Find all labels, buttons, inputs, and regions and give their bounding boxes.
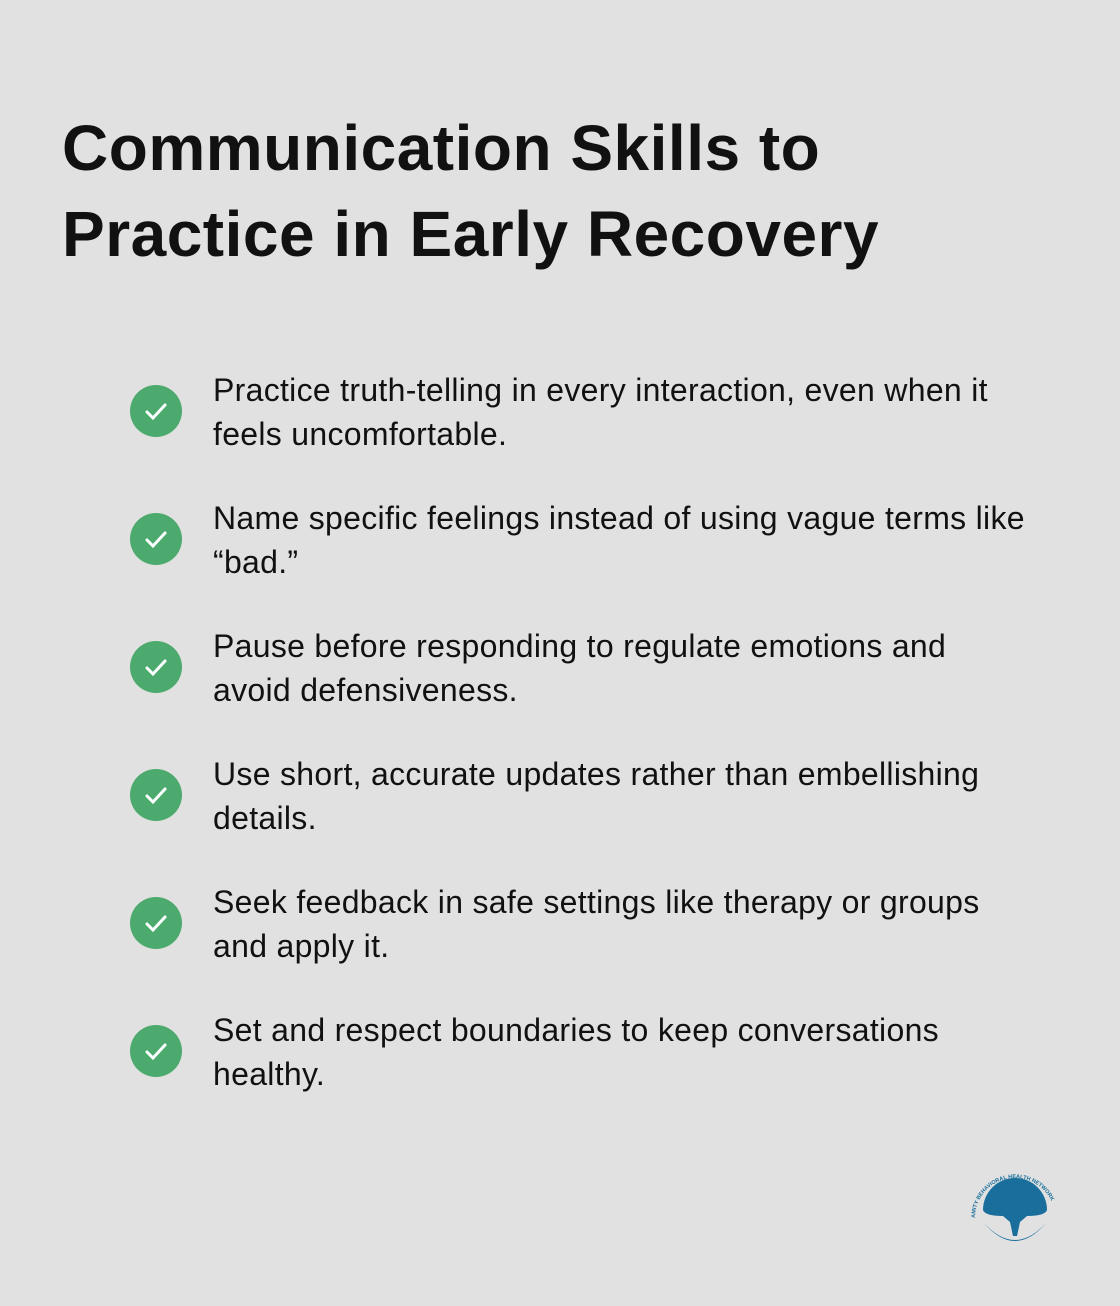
text 3: Pause before responding to regulate emotions and <box>213 628 946 664</box>
logo <box>971 1174 1055 1241</box>
icon: check <box>130 641 182 693</box>
icon: check <box>130 1025 182 1077</box>
text 2: Name specific feelings instead of using vague terms like <box>213 500 1025 536</box>
text 2: “bad.” <box>213 544 298 580</box>
icon: check <box>130 385 182 437</box>
title: Practice in Early Recovery <box>62 198 879 270</box>
logo: AMITY BEHAVIORAL HEALTH NETWORK <box>971 1174 1055 1218</box>
title: Communication Skills to <box>62 112 820 184</box>
title <box>62 112 879 270</box>
text 5 <box>213 884 980 964</box>
text 6 <box>213 1012 939 1092</box>
text 3 <box>213 628 946 708</box>
item 3 <box>130 628 946 708</box>
item 4 <box>130 756 979 836</box>
item 6 <box>130 1012 939 1092</box>
text 4 <box>213 756 979 836</box>
icon: check <box>130 897 182 949</box>
text 1: feels uncomfortable. <box>213 416 507 452</box>
text 1 <box>213 372 988 452</box>
item 5 <box>130 884 980 964</box>
text 5: and apply it. <box>213 928 389 964</box>
text 6: healthy. <box>213 1056 325 1092</box>
item 1 <box>130 372 988 452</box>
icon: check <box>130 513 182 565</box>
icon: check <box>130 769 182 821</box>
text 3: avoid defensiveness. <box>213 672 518 708</box>
text 2 <box>213 500 1025 580</box>
text 5: Seek feedback in safe settings like therapy or groups <box>213 884 980 920</box>
text 1: Practice truth-telling in every interaction, even when it <box>213 372 988 408</box>
item 2 <box>130 500 1025 580</box>
text 4: details. <box>213 800 317 836</box>
text 6: Set and respect boundaries to keep conversations <box>213 1012 939 1048</box>
text 4: Use short, accurate updates rather than embellishing <box>213 756 979 792</box>
